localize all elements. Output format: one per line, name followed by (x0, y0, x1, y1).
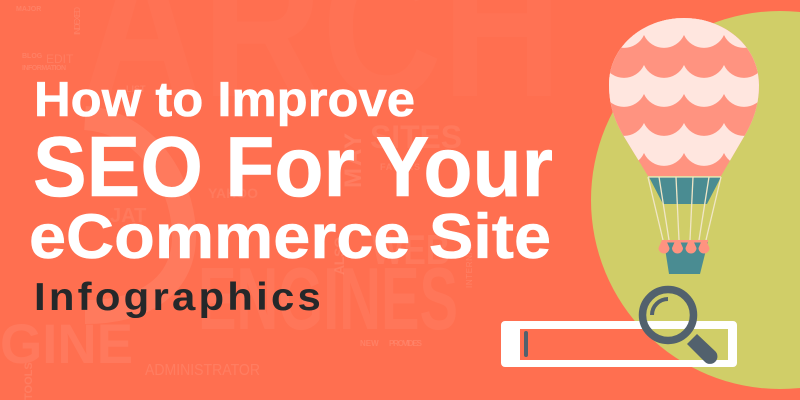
watermark word cloud: INFORMATION (22, 65, 66, 72)
watermark word cloud: INDEXED (73, 7, 82, 35)
green circle (591, 11, 800, 389)
basket (664, 242, 708, 274)
watermark word cloud: NEW (360, 339, 379, 348)
icon: hot air balloon (609, 18, 759, 274)
watermark word cloud: JAT (110, 205, 146, 227)
watermark word cloud: BLOG (22, 53, 43, 60)
title line 3: eCommerce Site (29, 202, 551, 272)
watermark word cloud: YAHOO (208, 185, 258, 201)
search bar (501, 321, 737, 367)
watermark word cloud (0, 0, 562, 400)
watermark word cloud: ADMINISTRATOR (145, 362, 260, 379)
watermark word cloud: INTERNAL (465, 243, 474, 288)
icon: magnifying glass (642, 290, 717, 364)
watermark word cloud: TOOLS (23, 362, 35, 400)
watermark word cloud: EDIT (46, 52, 74, 66)
watermark word cloud: MAY (340, 133, 367, 188)
watermark word cloud: SITES (370, 119, 462, 155)
ropes (648, 177, 721, 240)
watermark word cloud: FAVORS (380, 162, 420, 172)
watermark word cloud: ENGINES (198, 249, 458, 348)
subtitle: Infographics (34, 276, 324, 319)
title line 2: SEO For Your (33, 120, 553, 215)
balloon collar (649, 177, 721, 204)
watermark word cloud: MAJOR (16, 6, 41, 13)
watermark word cloud: WEB (372, 226, 450, 273)
balloon envelope (609, 18, 759, 176)
text cursor (524, 331, 528, 357)
basket trim (658, 240, 710, 254)
title line 1: How to Improve (34, 73, 415, 127)
watermark word cloud: GINE (0, 312, 133, 375)
watermark word cloud: ALSO (331, 237, 347, 275)
watermark word cloud: LIST (126, 84, 146, 94)
watermark word cloud: PROVIDES (389, 339, 423, 348)
